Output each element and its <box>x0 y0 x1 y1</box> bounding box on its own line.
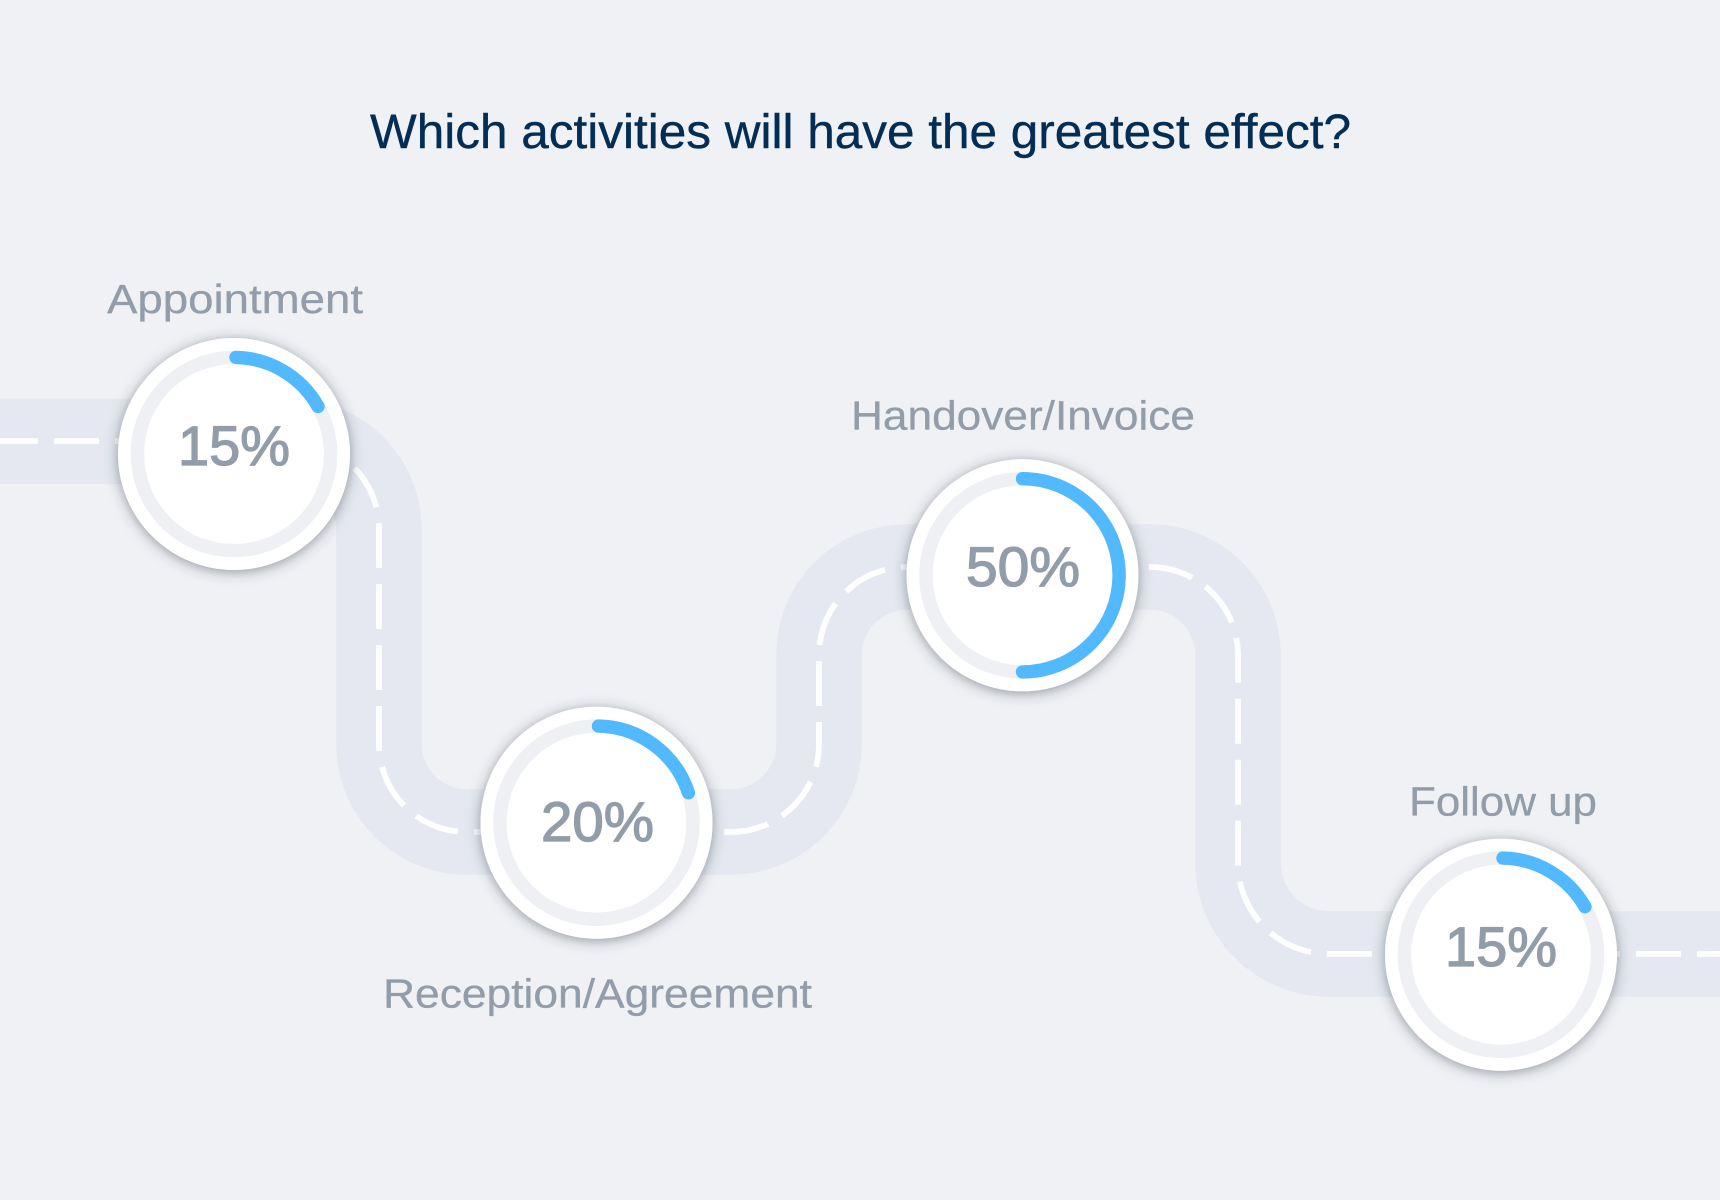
road centre dashes <box>0 441 1720 954</box>
label: Reception/Agreement: Reception/Agreement <box>383 970 813 1016</box>
gauge: 15 percent <box>1385 839 1617 1071</box>
step: Follow up <box>1385 779 1617 1071</box>
step: Handover/Invoice <box>851 392 1195 691</box>
step: Reception/Agreement <box>383 707 813 1016</box>
label: Follow up: Follow up <box>1409 779 1597 825</box>
title: Which activities will have the greatest effect? <box>370 106 1351 159</box>
label: Appointment: Appointment <box>107 276 364 322</box>
gauge: 15 percent: 15% <box>1445 915 1557 978</box>
gauge: 50 percent <box>906 459 1138 691</box>
label: Handover/Invoice: Handover/Invoice <box>851 392 1195 438</box>
gauge: 15 percent: 15% <box>178 414 290 477</box>
step: Appointment <box>107 276 364 570</box>
winding road <box>0 442 1720 954</box>
gauge: 50 percent: 50% <box>966 535 1080 598</box>
gauge: 20 percent: 20% <box>541 790 654 853</box>
gauge: 15 percent <box>118 338 350 570</box>
gauge: 20 percent <box>480 707 712 939</box>
